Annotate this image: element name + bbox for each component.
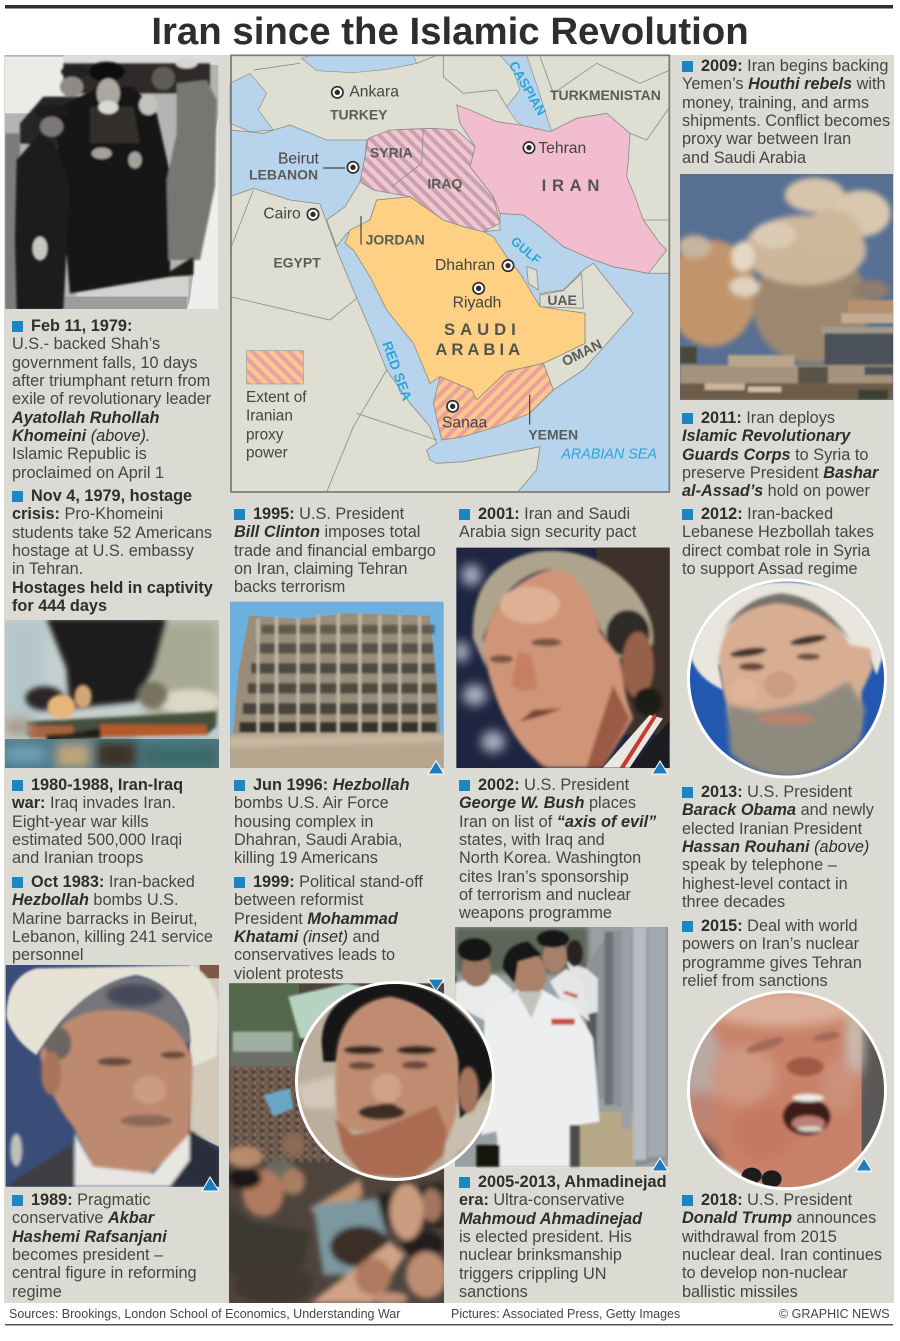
text: 1999: conservatives leads to (234, 946, 395, 964)
text: 1989: conservative Akbar (12, 1209, 154, 1227)
photo inset: Donald Trump circle (685, 990, 888, 1192)
text: 1999: 1999: Political stand-off (253, 873, 423, 891)
text: 1999: President Mohammad (234, 910, 398, 928)
map: extent of Iranian proxy power (230, 55, 670, 493)
map seas (230, 55, 552, 135)
region: Iran (457, 105, 667, 273)
map labels: GULF (508, 234, 544, 267)
map labels: IRAN (542, 176, 605, 195)
text: Jun 1996: Dhahran, Saudi Arabia, (234, 831, 402, 849)
text: 2009: and Saudi Arabia (682, 149, 806, 167)
photo: smoke over Yemen city (666, 174, 895, 401)
text: 2011 (682, 409, 880, 500)
text: 2018: to develop non-nuclear (682, 1264, 848, 1282)
map labels: JORDAN (366, 231, 425, 247)
text: Nov 4 1979 hostage crisis: Hostages held in captivity (12, 579, 213, 597)
text: Oct 1983 (12, 873, 213, 964)
text: 2012 (682, 505, 874, 578)
text: 1980-1988 war: and Iranian troops (12, 849, 143, 867)
region: Saudi Arabia (345, 197, 585, 400)
map labels: ARABIAN SEA (560, 447, 657, 463)
text: Oct 1983: Lebanon, killing 241 service (12, 928, 213, 946)
text: 2009: proxy war between Iran (682, 130, 851, 148)
text: 2011: al-Assad’s hold on power (682, 482, 870, 500)
text: 2018: ballistic missiles (682, 1283, 798, 1301)
footer: picture credits: Pictures: Associated Press, Getty Images (451, 1307, 680, 1321)
map labels (246, 59, 661, 463)
map labels: RED SEA (379, 339, 415, 403)
map labels: UAE (547, 292, 577, 308)
text: 1995: on Iran, claiming Tehran (234, 560, 407, 578)
text: 1980-1988 war (12, 776, 183, 867)
text: 2009 (682, 57, 890, 167)
text: 2002: Iran on list of “axis of evil” (459, 813, 656, 831)
bottom rule (5, 1324, 893, 1326)
map labels: proxy (246, 426, 284, 443)
text: Nov 4 1979 hostage crisis: for 444 days (12, 597, 107, 615)
text: 2002: of terrorism and nuclear (459, 886, 631, 904)
map labels: Tehran (538, 140, 586, 157)
map labels: TURKMENISTAN (550, 87, 661, 103)
map labels: Iranian (246, 408, 293, 425)
map labels: power (246, 444, 288, 461)
text: Feb 11 1979: Ayatollah Ruhollah (12, 409, 159, 427)
text: Feb 11 1979: Islamic Republic is (12, 445, 147, 463)
text: Feb 11 1979: exile of revolutionary leader (12, 390, 211, 408)
map labels: Ankara (349, 83, 399, 100)
text: 1995: trade and financial embargo (234, 542, 436, 560)
photo: bombed Khobar Towers building (230, 602, 444, 768)
text: Jun 1996 (234, 776, 410, 867)
text: Feb 11 1979: U.S.- backed Shah’s (12, 335, 160, 353)
text: Feb 11 1979: government falls, 10 days (12, 354, 198, 372)
text: Feb 11 1979: after triumphant return from (12, 372, 210, 390)
footer: copyright: © GRAPHIC NEWS (779, 1307, 890, 1321)
top rule (5, 5, 893, 8)
text: 2013: elected Iranian President (682, 820, 862, 838)
text: 2005-2013: era: Ultra-conservative (459, 1191, 625, 1209)
text: 2002: cites Iran’s sponsorship (459, 868, 629, 886)
text: 2018: 2018: U.S. President (701, 1191, 852, 1209)
text: Nov 4 1979 hostage crisis: crisis: Pro-Khomeini (12, 505, 163, 523)
map labels: OMAN (559, 336, 604, 369)
text: 1980-1988 war: estimated 500,000 Iraqi (12, 831, 182, 849)
map labels: SAUDI (444, 320, 521, 339)
text: 2005-2013: sanctions (459, 1283, 528, 1301)
photo: Khomeini descending aircraft steps (5, 55, 218, 310)
map land (230, 55, 670, 493)
text: 2013: three decades (682, 893, 785, 911)
text: 2005-2013: is elected president. His (459, 1228, 632, 1246)
text: Oct 1983: Hezbollah bombs U.S. (12, 891, 178, 909)
text: 2015 (682, 917, 862, 990)
photo: Tehran protest crowd (227, 983, 447, 1305)
text: 2002: George W. Bush places (459, 794, 636, 812)
text: 1980-1988 war: Eight-year war kills (12, 813, 149, 831)
text: Jun 1996: Jun 1996: Hezbollah (253, 776, 410, 794)
text: 2009: money, training, and arms (682, 94, 869, 112)
text: 2001 (459, 505, 636, 541)
photo: burning tanker (5, 618, 221, 768)
text: 2005-2013 (459, 1173, 667, 1301)
text: 1999: between reformist (234, 891, 363, 909)
text: 2011: preserve President Bashar (682, 464, 878, 482)
text: 2001: 2001: Iran and Saudi (478, 505, 630, 523)
region: Yemen hatch (433, 363, 553, 440)
title: Iran since the Islamic Revolution (151, 10, 749, 53)
text: 2012: direct combat role in Syria (682, 542, 870, 560)
map labels: YEMEN (528, 427, 578, 443)
legend swatch (247, 351, 303, 384)
text: 2013 (682, 783, 874, 911)
text: 2005-2013: Mahmoud Ahmadinejad (459, 1210, 642, 1228)
text: 2018 (682, 1191, 882, 1301)
text: 2015: powers on Iran’s nuclear (682, 935, 859, 953)
text: Oct 1983: Marine barracks in Beirut, (12, 910, 198, 928)
map labels: TURKEY (330, 107, 388, 123)
text: 1999: violent protests (234, 965, 344, 983)
text: 2015: relief from sanctions (682, 972, 828, 990)
text: 1989 (12, 1191, 197, 1301)
text: 2013: speak by telephone – (682, 856, 837, 874)
text: 1980-1988 war: 1980-1988, Iran-Iraq (31, 776, 183, 794)
text: 2005-2013: 2005-2013, Ahmadinejad (478, 1173, 667, 1191)
map labels: ARABIA (435, 340, 524, 359)
icon: photo credit triangles (202, 761, 872, 1191)
text: 2011: 2011: Iran deploys (701, 409, 835, 427)
text: 2009: Yemen’s Houthi rebels with (682, 75, 886, 93)
map frame (231, 55, 669, 492)
text: 1999 (234, 873, 423, 983)
map labels: Cairo (263, 206, 301, 223)
text: 2002: states, with Iraq and (459, 831, 605, 849)
text: Feb 11 1979: Khomeini (above). (12, 427, 150, 445)
text: 2011: Islamic Revolutionary (682, 427, 850, 445)
text: Feb 11 1979: proclaimed on April 1 (12, 464, 164, 482)
map labels: CASPIAN (506, 59, 549, 118)
text: 1995: Bill Clinton imposes total (234, 523, 420, 541)
map labels: Dhahran (435, 257, 495, 274)
map leader lines (323, 168, 530, 425)
photo inset: Hassan Rouhani circle (687, 578, 888, 780)
photo: Rafsanjani portrait (6, 965, 219, 1187)
map labels: Beirut (278, 150, 320, 167)
text: 2002: weapons programme (459, 904, 612, 922)
text: 1999: Khatami (inset) and (234, 928, 380, 946)
text: Oct 1983: personnel (12, 946, 84, 964)
text: 2009: 2009: Iran begins backing (701, 57, 888, 75)
text: 2009: shipments. Conflict becomes (682, 112, 890, 130)
text: 2015: programme gives Tehran (682, 954, 862, 972)
text: Jun 1996: killing 19 Americans (234, 849, 378, 867)
text: Nov 4 1979 hostage crisis: hostage at U.S. embassy (12, 542, 194, 560)
text: 1989: central figure in reforming (12, 1264, 197, 1282)
text: Nov 4 1979 hostage crisis (12, 487, 213, 615)
map borders (230, 55, 670, 492)
text: 2015: 2015: Deal with world (701, 917, 858, 935)
text: 1989: regime (12, 1283, 62, 1301)
text: 2013: highest-level contact in (682, 875, 848, 893)
map labels: IRAQ (427, 175, 462, 191)
text: 1989: 1989: Pragmatic (31, 1191, 150, 1209)
text: 1989: Hashemi Rafsanjani (12, 1228, 167, 1246)
text: 2005-2013: triggers crippling UN (459, 1265, 606, 1283)
text: 2013: 2013: U.S. President (701, 783, 852, 801)
text: 2002: North Korea. Washington (459, 849, 641, 867)
map labels: Riyadh (453, 294, 501, 311)
text: Nov 4 1979 hostage crisis: in Tehran. (12, 560, 83, 578)
text: 1980-1988 war: war: Iraq invades Iran. (12, 794, 176, 812)
text: 2012: Lebanese Hezbollah takes (682, 523, 874, 541)
region: Syria and Iraq hatch (360, 128, 500, 232)
text: Feb 11 1979: Feb 11, 1979: (31, 317, 132, 335)
text: 2013: Hassan Rouhani (above) (682, 838, 869, 856)
text: 2018: Donald Trump announces (682, 1209, 876, 1227)
text: 1989: becomes president – (12, 1246, 163, 1264)
text: 2012: to support Assad regime (682, 560, 858, 578)
photo: Ahmadinejad at nuclear plant (453, 927, 668, 1167)
map labels: SYRIA (370, 144, 413, 160)
text: 2001: Arabia sign security pact (459, 523, 636, 541)
text: Oct 1983: Oct 1983: Iran-backed (31, 873, 195, 891)
icon: city markers (307, 87, 535, 412)
text: 1995 (234, 505, 436, 596)
map labels: EGYPT (273, 254, 321, 270)
text: 2002 (459, 776, 656, 922)
text: 2018: withdrawal from 2015 (682, 1228, 837, 1246)
text: 2005-2013: nuclear brinksmanship (459, 1246, 622, 1264)
text: 1995: backs terrorism (234, 578, 345, 596)
text: 2013: Barack Obama and newly (682, 801, 874, 819)
text: 2012: 2012: Iran-backed (701, 505, 833, 523)
text: 1995: 1995: U.S. President (253, 505, 404, 523)
footer: sources: Sources: Brookings, London School of Economics, Understanding War (9, 1307, 400, 1321)
map labels: Sanaa (442, 415, 488, 432)
map labels: Extent of (246, 389, 307, 406)
photo: George W. Bush portrait (453, 548, 670, 768)
text: Feb 11 1979 (12, 317, 211, 482)
text: Jun 1996: housing complex in (234, 813, 373, 831)
text: 2002: 2002: U.S. President (478, 776, 629, 794)
text: Nov 4 1979 hostage crisis: Nov 4, 1979, hostage (31, 487, 192, 505)
text: 2018: nuclear deal. Iran continues (682, 1246, 882, 1264)
text: 2011: Guards Corps to Syria to (682, 446, 868, 464)
text: Nov 4 1979 hostage crisis: students take 52 Americans (12, 524, 212, 542)
photo inset: Khatami circle (293, 980, 497, 1183)
map labels: LEBANON (249, 167, 318, 183)
text: Jun 1996: bombs U.S. Air Force (234, 794, 389, 812)
